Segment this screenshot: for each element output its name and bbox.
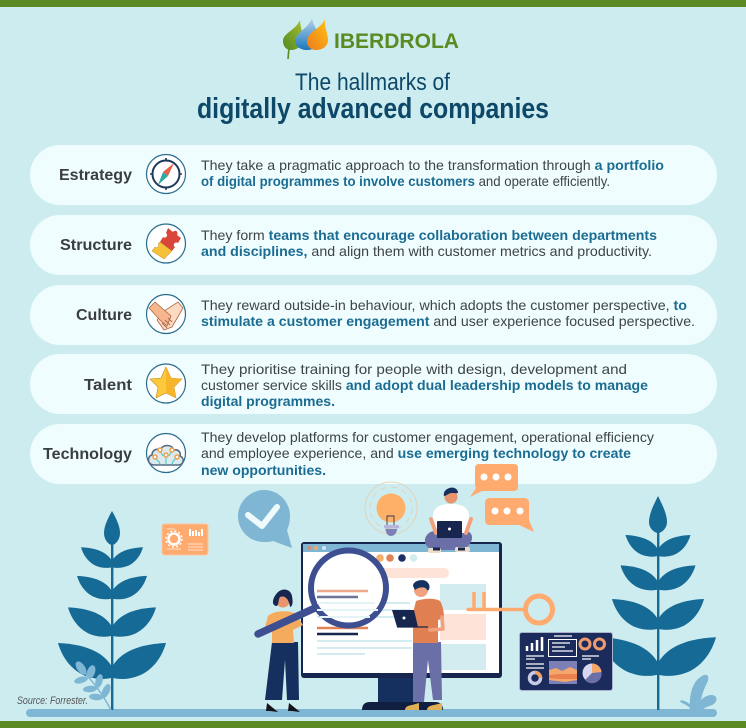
illustration: woman holding magnifier [258, 550, 386, 712]
icon: puzzle [146, 224, 186, 263]
description: Technology: new opportunities. [201, 463, 326, 478]
plant: right [600, 496, 716, 710]
description: Technology: and employee experience, and use emerging technology to create [201, 446, 631, 461]
description: Culture [201, 298, 695, 329]
panel: Talent [30, 354, 717, 414]
description: Talent: They prioritise training for people with design, development and [201, 362, 627, 377]
label: Talent: Talent [84, 377, 133, 394]
illustration: lightbulb [365, 482, 417, 536]
illustration: orange chat bubbles [470, 464, 534, 532]
title: digitally advanced companies [197, 93, 549, 125]
plant: small right [680, 675, 717, 710]
description: Structure [201, 228, 657, 259]
description: Structure: and disciplines, and align them with customer metrics and productivity. [201, 244, 652, 259]
description: Structure: They form teams that encourage collaboration between departments [201, 228, 657, 243]
logo: Iberdrola [283, 18, 459, 59]
description: Talent: customer service skills and adopt dual leadership models to manage [201, 378, 648, 393]
description: Talent [201, 362, 648, 409]
illustration: monitor [301, 542, 502, 710]
source note: Source: Forrester. [17, 695, 88, 707]
icon: star [146, 364, 186, 403]
description: Culture: They reward outside-in behaviour, which adopts the customer perspective, to [201, 298, 687, 313]
plant: small left [73, 660, 112, 710]
label: Estrategy: Estrategy [59, 167, 132, 184]
icon: handshake [146, 294, 186, 334]
illustration: key [468, 592, 552, 623]
description: Estrategy [201, 158, 664, 189]
ground line [26, 709, 717, 717]
illustration: standing man with laptop [392, 580, 444, 710]
label: Culture: Culture [76, 307, 132, 324]
description: Culture: stimulate a customer engagement and user experience focused perspective. [201, 314, 695, 329]
illustration: sitting man with laptop [425, 488, 472, 553]
logo: Iberdrola: IBERDROLA [334, 30, 459, 53]
panel: Structure [30, 215, 717, 275]
label: Structure: Structure [60, 237, 132, 254]
icon: orange settings card [162, 524, 208, 555]
panel: Technology [30, 424, 717, 484]
plant: left [58, 511, 166, 710]
icon: compass [146, 154, 186, 194]
label: Technology: Technology [43, 446, 132, 463]
panel: Estrategy [30, 145, 717, 205]
description: Estrategy: They take a pragmatic approach to the transformation through a portfolio [201, 158, 664, 173]
description: Talent: digital programmes. [201, 394, 335, 409]
title: The hallmarks of [295, 69, 450, 96]
description: Estrategy: of digital programmes to involve customers and operate efficiently. [201, 174, 610, 189]
description: Technology: They develop platforms for customer engagement, operational efficiency [201, 430, 654, 445]
icon: cloud circuit [146, 434, 186, 472]
speech bubble with check [238, 490, 292, 548]
title [197, 69, 549, 125]
panel: Culture [30, 285, 717, 345]
illustration: dashboard panel [520, 632, 612, 690]
description: Technology [201, 430, 654, 478]
